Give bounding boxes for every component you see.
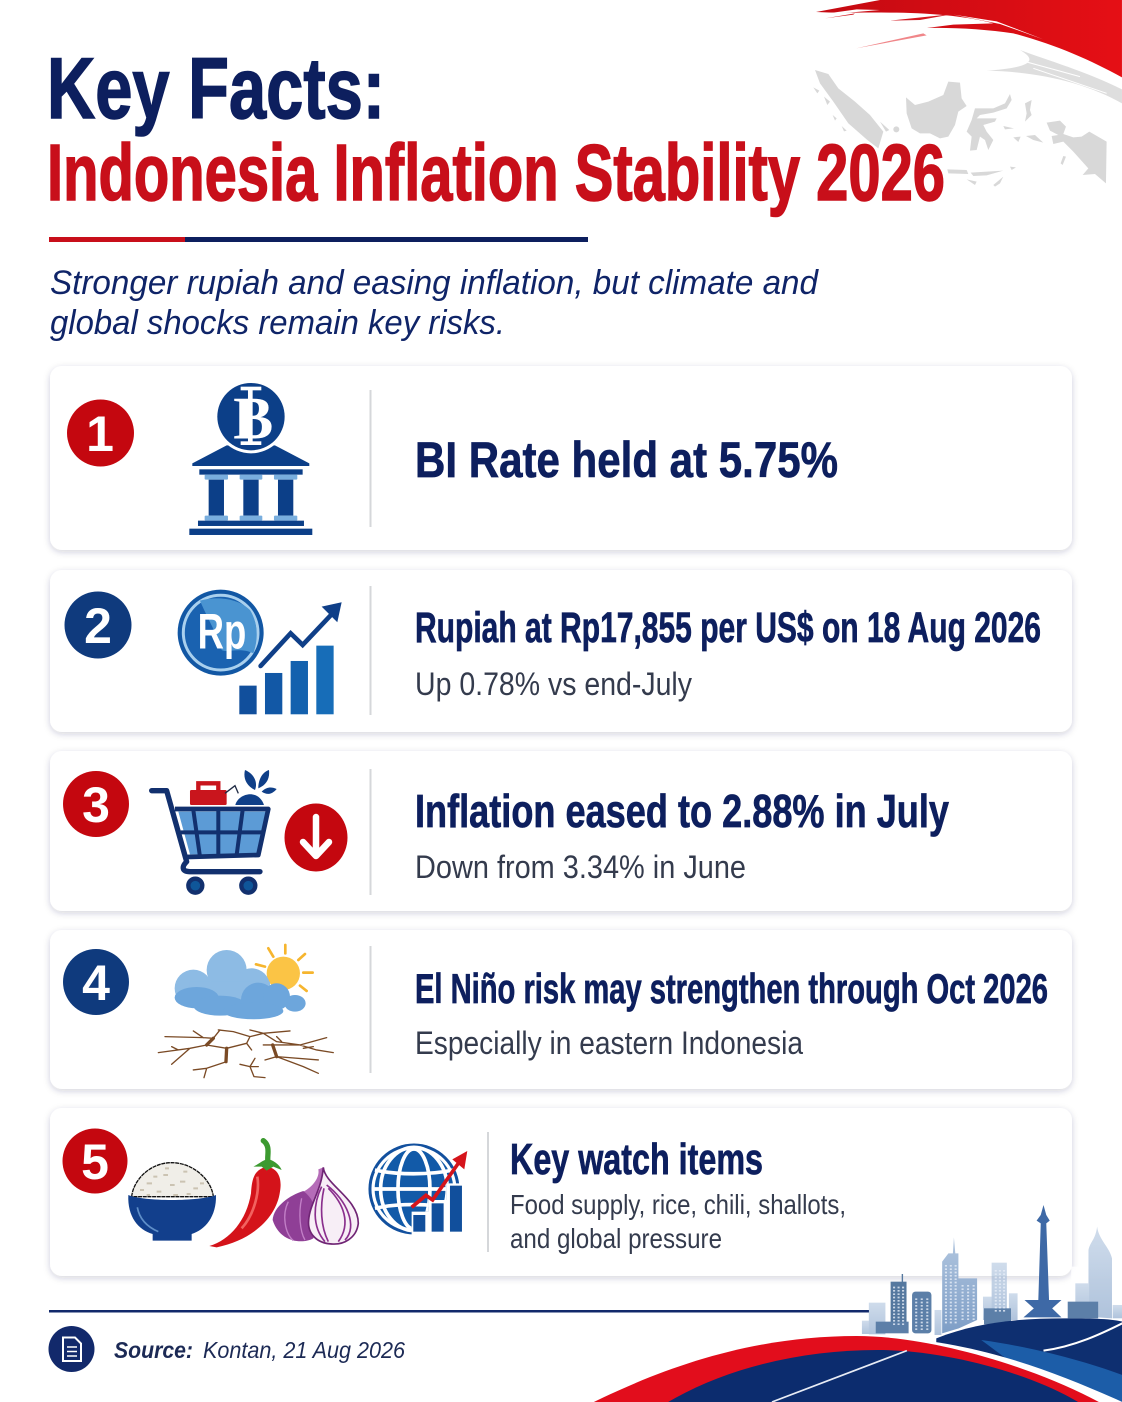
- number badge 5: 5: [81, 1134, 109, 1190]
- icon: source document: [48, 1326, 94, 1372]
- icon: rupiah coin and rising bars: [178, 590, 342, 714]
- icon: central bank: [189, 380, 312, 535]
- map of Indonesia: [813, 70, 1107, 187]
- city skyline: [862, 1205, 1122, 1335]
- text: inflation: Inflation eased to 2.88% in July: [415, 785, 949, 837]
- text: key watch items: [510, 1135, 846, 1254]
- icon: rupiah coin and rising bars: Rp: [198, 603, 246, 659]
- number badge 5: [62, 1128, 128, 1194]
- icon: rice bowl: [128, 1163, 216, 1241]
- icon: down arrow: [284, 804, 348, 872]
- title: [47, 41, 945, 217]
- title: Key Facts:: [47, 41, 385, 137]
- panel: fact 2: [50, 570, 1072, 732]
- icon: central bank: B: [233, 385, 273, 451]
- icon: cracked earth: [158, 1030, 333, 1078]
- text: key watch items: Food supply, rice, chili, shallots,: [510, 1189, 846, 1220]
- icon: globe with rising chart: [370, 1145, 467, 1233]
- wave graphic, bottom right: [594, 1318, 1122, 1402]
- number badge 2: [64, 592, 132, 658]
- text: key watch items: Key watch items: [510, 1135, 763, 1184]
- number badge 1: 1: [86, 406, 114, 462]
- number badge 4: [63, 949, 129, 1015]
- source text: Source:: [114, 1337, 193, 1363]
- text: key watch items: and global pressure: [510, 1223, 722, 1254]
- source text: [114, 1337, 405, 1363]
- icon: red chili: [209, 1141, 282, 1247]
- red brush stroke, top right: [816, 0, 1122, 103]
- subtitle: Stronger rupiah and easing inflation, but climate and: [50, 264, 819, 302]
- icon: shallots: [273, 1167, 358, 1244]
- source text: Kontan, 21 Aug 2026: [203, 1337, 405, 1363]
- number badge 3: [63, 771, 129, 837]
- panel: fact 3: [50, 751, 1072, 911]
- number badge 3: 3: [82, 777, 110, 833]
- number badge 4: 4: [82, 955, 110, 1011]
- number badge 1: [67, 400, 134, 466]
- panel: fact 4: [50, 930, 1072, 1089]
- text: inflation: Down from 3.34% in June: [415, 849, 746, 885]
- subtitle: [50, 264, 819, 342]
- text: El Nino: Especially in eastern Indonesia: [415, 1025, 803, 1061]
- number badge 2: 2: [84, 598, 112, 654]
- panel: fact 5: [50, 1108, 1072, 1276]
- subtitle: global shocks remain key risks.: [50, 304, 505, 342]
- text: rupiah: Up 0.78% vs end-July: [415, 666, 692, 702]
- text: inflation: [415, 785, 949, 885]
- source divider line: [49, 1310, 869, 1312]
- title underline: [49, 237, 588, 242]
- text: rupiah: [415, 604, 1041, 702]
- panel: fact 1: [50, 366, 1072, 550]
- heading: BI rate: BI Rate held at 5.75%: [415, 432, 838, 488]
- icon: shopping cart: [152, 770, 277, 893]
- text: El Nino: [415, 965, 1048, 1061]
- icon: cloud and sun: [175, 945, 313, 1019]
